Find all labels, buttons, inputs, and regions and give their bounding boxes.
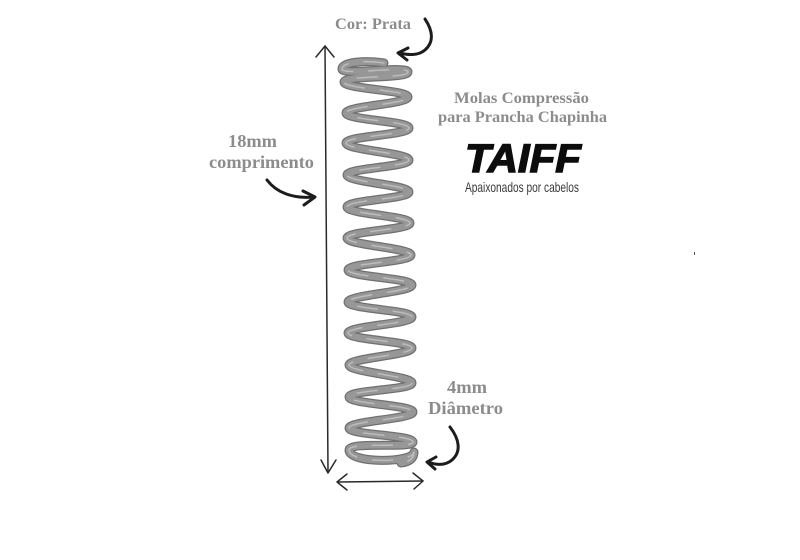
arrow: diameter pointer bbox=[427, 427, 458, 469]
label: length bbox=[209, 131, 314, 172]
label: length: comprimento bbox=[209, 152, 314, 172]
arrow: vertical length dimension bbox=[316, 46, 336, 473]
label: colour: Cor: Prata bbox=[335, 16, 411, 33]
label: length: 18mm bbox=[228, 131, 277, 151]
label: diameter: 4mm bbox=[447, 377, 487, 397]
logo: TAIFF: Apaixonados por cabelos bbox=[465, 179, 579, 195]
label: diameter: Diâmetro bbox=[428, 398, 503, 418]
heading: product name: para Prancha Chapinha bbox=[438, 109, 607, 126]
arrow: length pointer bbox=[267, 180, 315, 205]
label: diameter bbox=[428, 377, 503, 418]
logo: TAIFF: TAIFF bbox=[465, 137, 583, 181]
arrow: horizontal diameter dimension bbox=[337, 473, 423, 490]
heading: product name: Molas Compressão bbox=[454, 90, 589, 107]
heading: product name bbox=[438, 90, 607, 126]
arrow: colour pointer bbox=[398, 19, 431, 60]
spring bbox=[342, 62, 414, 463]
